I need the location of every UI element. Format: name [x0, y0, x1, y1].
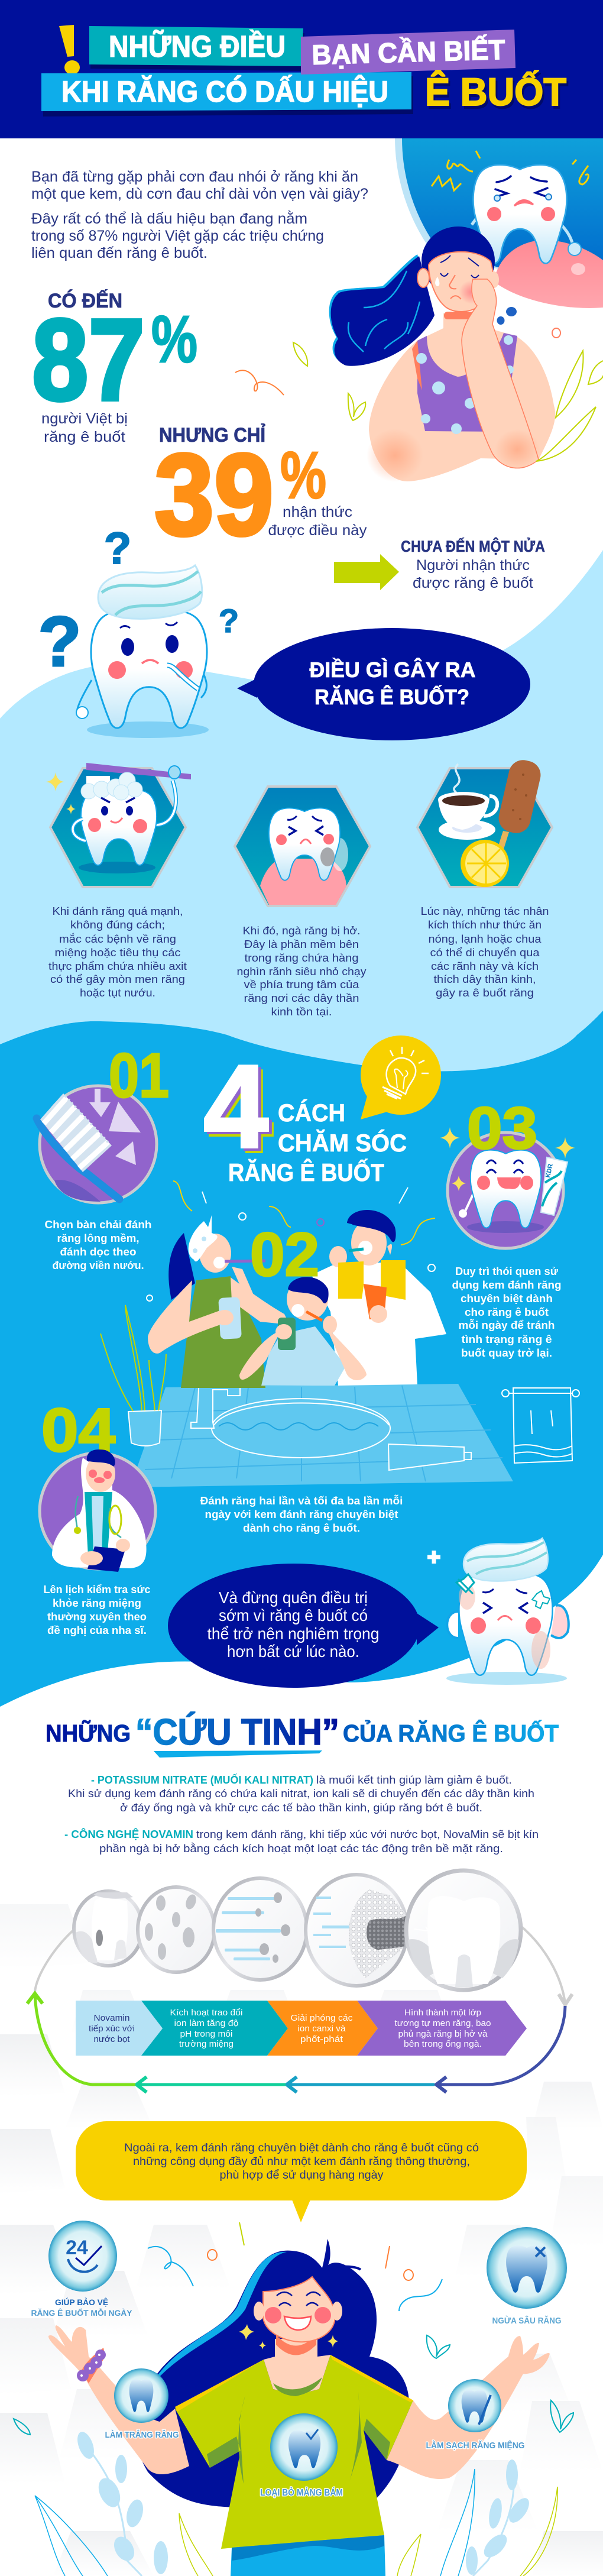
title block: Ê BUỐT [427, 73, 568, 116]
speech bubble: early treatment [168, 1564, 439, 1688]
stat: 87 percent: người Việt bị [41, 410, 128, 427]
process chevrons [76, 2001, 527, 2056]
label: 24h protection [31, 2297, 132, 2318]
intro text: Đây rất có thể là dấu hiệu bạn đang nằm [31, 210, 307, 227]
circle 1 tooth [74, 1891, 142, 1966]
heading: the saviors of sensitive teeth [46, 1712, 559, 1758]
callout: less than half: Người nhận thức [416, 557, 530, 574]
intro text: một que kem, dù cơn đau chỉ dài vỏn vẹn vài giây? [31, 186, 368, 202]
step 04: dentist [40, 1449, 155, 1572]
text: step 01 [45, 1219, 151, 1271]
step: form layer [357, 2001, 527, 2056]
text: cause 3: nóng, lạnh hoặc chua [428, 933, 542, 945]
text: ingredients description: phần ngà bị hở bằng cách kích hoạt một loạt các tác động trên bề mặt răng. [99, 1842, 503, 1855]
text: step 01: Chọn bàn chải đánh [45, 1219, 151, 1231]
text: cause 1: miệng hoặc tiêu thụ các [54, 947, 181, 959]
speech bubble: early treatment: sớm vì răng ê buốt có [219, 1606, 368, 1624]
speech bubble: what causes sensitivity: ĐIỀU GÌ GÂY RA [310, 657, 475, 682]
speech bubble: early treatment: Và đừng quên điều trị [219, 1588, 368, 1607]
illustration: confused tooth with question marks: ? [38, 602, 82, 681]
number 01: 01 [109, 1041, 169, 1111]
number 03: 03 [467, 1095, 537, 1161]
father [312, 1210, 446, 1386]
step 03: happy tooth with toothpaste: KDR [544, 1163, 555, 1179]
text: step 04: thường xuyên theo [47, 1611, 147, 1623]
panel: header [0, 0, 603, 138]
illustration: family brushing teeth [147, 1181, 446, 1388]
illustration: confused tooth with question marks: ? [219, 602, 239, 639]
number 04: 04 [41, 1396, 115, 1465]
text: cause 2 [236, 925, 367, 1018]
text: step 04: Lên lịch kiểm tra sức [44, 1584, 150, 1596]
text: step 01: đường viền nướu. [52, 1260, 144, 1271]
circle 5 healthy tooth [406, 1870, 521, 1990]
text: cause 1 [48, 905, 187, 999]
callout: less than half: được răng ê buốt [413, 575, 533, 591]
text: step 03 [452, 1266, 562, 1359]
text: cause 2: nghìn rãnh siêu nhỏ chạy [236, 966, 367, 978]
stat: 39 percent: % [280, 438, 326, 512]
step: release [267, 2001, 378, 2056]
text: cause 1: không đúng cách; [70, 919, 165, 931]
step: form layer: phủ ngà răng bị hở và [398, 2029, 488, 2039]
panel: cause 2 exposed dentin [235, 787, 370, 906]
text: ingredients description [64, 1774, 539, 1855]
decorative plants at bottom [35, 2429, 557, 2576]
heading: 4 ways [203, 1041, 407, 1186]
stat: 87 percent: 87 [32, 295, 145, 425]
text: step 04: đề nghị của nha sĩ. [47, 1624, 147, 1636]
text: step 03: mỗi ngày để tránh [459, 1319, 555, 1331]
arrow [334, 554, 399, 590]
illustration: happy girl [48, 2239, 550, 2576]
illustration: confused tooth with question marks [38, 523, 239, 738]
text: cause 1: hoặc tụt nướu. [80, 987, 155, 999]
text: step 02: Đánh răng hai lần và tối đa ba lần mỗi [200, 1494, 403, 1507]
right arm [387, 2357, 526, 2479]
title block: KHI RĂNG CÓ DẤU HIỆU [61, 75, 388, 108]
mother [148, 1215, 290, 1388]
circle 4 gel [306, 1875, 407, 1986]
background hex pattern [0, 1904, 603, 2576]
step: contact: Novamin [93, 2013, 130, 2023]
step: release: Giải phóng các [291, 2013, 353, 2023]
panel: cause 3 hot cold sour foods [417, 758, 552, 887]
text: step 03: dụng kem đánh răng [452, 1279, 562, 1291]
text: step 03: tình trạng răng ê [461, 1334, 552, 1345]
text: ingredients description: - POTASSIUM NITRATE (MUỐI KALI NITRAT) [91, 1774, 313, 1786]
heading: the saviors of sensitive teeth: NHỮNG [46, 1720, 131, 1747]
step: contact: nước bọt [93, 2034, 130, 2044]
neck and chest [264, 2339, 330, 2395]
text: ingredients description: Khi sử dụng kem đánh răng có chứa kali nitrat, ion kali sẽ di chuyển đến các dây thần kinh [68, 1788, 534, 1800]
text: cause 3 [421, 905, 549, 999]
text: step 04: khỏe răng miệng [53, 1597, 141, 1609]
step: form layer: bên trong ống ngà. [404, 2039, 482, 2049]
text: cause 3: có thể di chuyển qua [430, 947, 540, 959]
text: step 02: ngày với kem đánh răng chuyên biệt [205, 1509, 398, 1520]
skirt [231, 2535, 385, 2576]
heading: 4 ways: RĂNG Ê BUỐT [228, 1158, 384, 1186]
bubble: plaque removal [270, 2413, 338, 2481]
text: cause 2: kinh tồn tại. [271, 1006, 332, 1018]
step: contact [76, 2001, 163, 2056]
label: 24h protection: GIÚP BẢO VỆ [55, 2297, 108, 2307]
illustration: girl with toothache [235, 226, 603, 482]
step: form layer: tương tự men răng, bao [395, 2018, 491, 2028]
stat: 87 percent: CÓ ĐẾN [48, 290, 122, 312]
text: cause 3: thích dây thần kinh, [434, 973, 536, 985]
text: step 03: cho răng ê buốt [465, 1306, 549, 1318]
text: cause 1: có thể gây mòn men răng [50, 973, 185, 985]
panel: cause 1 brushing too hard [46, 763, 191, 887]
heading: 4 ways: 4 [206, 1043, 271, 1175]
sink counter illustration [100, 1305, 579, 1487]
text: ingredients description: ở đáy ống ngà và khử cực các tế bào thần kinh, giúp răng bớt ê buốt. [120, 1802, 482, 1814]
text: cause 2: Đây là phần mềm bên [244, 939, 359, 950]
text: ingredients description: - CÔNG NGHỆ NOVAMIN [64, 1828, 193, 1840]
text: step 03: chuyên biệt dành [461, 1293, 553, 1305]
bubble: 24h protection [48, 2221, 117, 2292]
step: contact: tiếp xúc với [89, 2024, 135, 2034]
sparkles [440, 1127, 575, 1191]
circle 3 ions [213, 1878, 307, 1980]
label: prevent decay: NGỪA SÂU RĂNG [492, 2315, 562, 2326]
text: step 03: Duy trì thói quen sử [455, 1266, 559, 1277]
title block: Ê BUỐT [425, 70, 566, 114]
icon: exclamation mark [59, 25, 80, 75]
text: step 02: dành cho răng ê buốt. [243, 1522, 360, 1534]
step: release: ion canxi và [298, 2024, 346, 2034]
panel: blue care section background [0, 1011, 603, 1707]
process circles [74, 1870, 521, 1990]
text: step 04 [44, 1584, 150, 1636]
speech bubble: what causes sensitivity: RĂNG Ê BUỐT? [315, 684, 469, 709]
text: ingredients description: trong kem đánh răng, khi tiếp xúc với nước bọt, NovaMin sẽ bịt kín [196, 1829, 539, 1840]
stat: 39 percent: nhận thức [283, 504, 352, 520]
illustration: confused tooth with question marks: ? [104, 523, 131, 574]
label: clean mouth: LÀM SẠCH RĂNG MIỆNG [426, 2440, 525, 2451]
bubble: whitening [114, 2368, 168, 2423]
stat: 87 percent [32, 290, 197, 445]
text: cause 3: kích thích như thức ăn [428, 919, 542, 931]
yellow callout: Ngoài ra, kem đánh răng chuyên biệt dành cho răng ê buốt cũng có [124, 2142, 479, 2154]
yellow callout: phù hợp để sử dụng hàng ngày [220, 2169, 384, 2182]
stat: 39 percent: được điều này [268, 522, 367, 539]
bubble: 24h protection: 24 [66, 2237, 88, 2259]
text: cause 2: răng nơi các dây thần [244, 992, 359, 1004]
text: cause 3: gây ra ê buốt răng [436, 987, 534, 999]
intro text [31, 169, 368, 261]
step: ion exchange: pH trong môi [180, 2029, 233, 2039]
icon: lightbulb bubble [361, 1035, 441, 1119]
text: cause 1: thực phẩm chứa nhiều axit [48, 960, 187, 972]
yellow callout: những công dụng đầy đủ như một kem đánh răng thông thường, [133, 2156, 470, 2168]
title block [41, 26, 568, 116]
label: 24h protection: RĂNG Ê BUỐT MỖI NGÀY [31, 2308, 132, 2318]
left arm [85, 2368, 189, 2474]
shirt [175, 2355, 413, 2549]
text: cause 3: các rãnh này và kích [431, 960, 539, 972]
stat: 39 percent [154, 424, 367, 559]
step: form layer: Hình thành một lớp [404, 2008, 481, 2018]
step: ion exchange: ion làm tăng độ [174, 2018, 239, 2028]
speech bubble: early treatment: hơn bất cứ lúc nào. [227, 1642, 359, 1661]
heading: 4 ways: 4 [203, 1041, 268, 1173]
step: ion exchange: Kích hoạt trao đổi [170, 2008, 242, 2018]
bubble: clean mouth [448, 2379, 501, 2432]
heading: 4 ways: CHĂM SÓC [278, 1128, 407, 1157]
step 03: happy tooth with toothpaste [448, 1132, 568, 1248]
number 02: 02 [250, 1221, 319, 1289]
yellow callout [76, 2121, 527, 2222]
text: cause 1: mắc các bệnh về răng [59, 933, 176, 945]
novamin cycle arcs and arrows [27, 1926, 572, 2092]
heading: 4 ways: CÁCH [278, 1099, 345, 1127]
text: step 03: buốt quay trở lại. [461, 1347, 552, 1359]
scrunchie [81, 2348, 105, 2383]
stat: 87 percent: răng ê buốt [44, 429, 125, 445]
circle 2 pores [138, 1887, 215, 1972]
heading: 4 ways: 4 [208, 1046, 273, 1177]
heading: the saviors of sensitive teeth: “CỨU TINH” [135, 1712, 339, 1753]
text: cause 3: Lúc này, những tác nhân [421, 905, 549, 917]
callout: less than half: CHƯA ĐẾN MỘT NỬA [401, 536, 545, 555]
bubble: prevent decay [487, 2227, 567, 2309]
stat: 87 percent: % [151, 302, 197, 376]
speech bubble: early treatment: thể trở nên nghiêm trọng [207, 1624, 380, 1643]
text: cause 2: về phía trung tâm của [244, 979, 360, 991]
text: cause 2: Khi đó, ngà răng bị hở. [242, 925, 361, 937]
intro text: trong số 87% người Việt gặp các triệu chứng [31, 228, 324, 244]
title block: NHỮNG ĐIỀU [109, 29, 286, 63]
intro text: Bạn đã từng gặp phải cơn đau nhói ở răng khi ăn [31, 169, 358, 185]
text: cause 2: trong răng chứa hàng [245, 952, 358, 964]
stat: 39 percent: 39 [154, 430, 274, 559]
intro text: liên quan đến răng ê buốt. [31, 245, 208, 261]
title block: BẠN CẦN BIẾT [312, 34, 505, 70]
label: plaque removal: LOẠI BỎ MẢNG BÁM [260, 2487, 343, 2498]
label: whitening: LÀM TRẮNG RĂNG [105, 2429, 179, 2440]
text: step 02 [200, 1494, 403, 1534]
text: step 01: răng lông mềm, [57, 1232, 140, 1244]
callout: less than half [401, 536, 545, 591]
heading: the saviors of sensitive teeth: CỦA RĂNG Ê BUỐT [343, 1720, 559, 1747]
step 01: soft toothbrush [37, 1086, 157, 1203]
illustration: damaged tooth with bandages [427, 1538, 569, 1685]
panel: light blue background [0, 550, 603, 1071]
son [239, 1277, 367, 1386]
decorative squiggles and leaves [14, 2222, 573, 2435]
head [263, 2277, 335, 2342]
step: release: phốt-phát [300, 2034, 343, 2044]
text: cause 1: Khi đánh răng quá mạnh, [52, 905, 183, 917]
speech bubble: what causes sensitivity [237, 628, 530, 740]
text: step 01: đánh dọc theo [60, 1246, 136, 1258]
step: ion exchange: trường miệng [179, 2039, 234, 2049]
text: ingredients description: là muối kết tinh giúp làm giảm ê buốt. [316, 1774, 512, 1786]
stat: 39 percent: NHƯNG CHỈ [159, 424, 265, 446]
illustration: crying tooth on blue circle [395, 138, 603, 308]
step: ion exchange [141, 2001, 288, 2056]
